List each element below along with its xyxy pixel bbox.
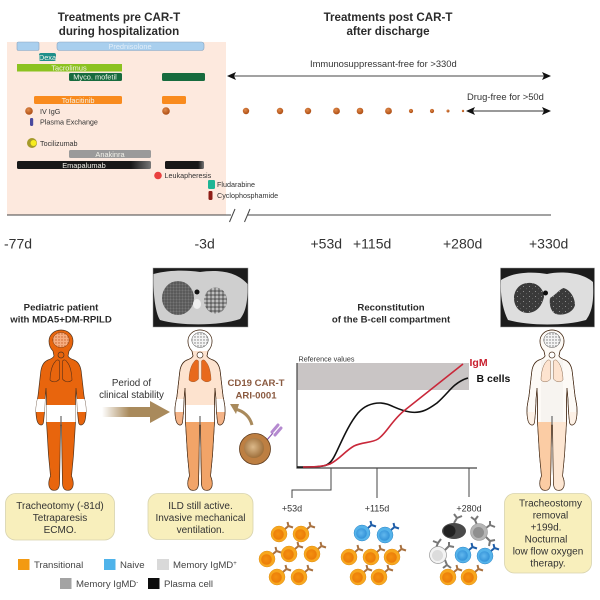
legend item: transitional: Transitional [34, 560, 83, 571]
chart: B-cell and IgM recovery curves [297, 354, 511, 468]
marker: fludarabine: Fludarabine [217, 180, 255, 189]
reference values band: Reference values [298, 354, 355, 364]
marker: plasma exchange: Plasma Exchange [40, 118, 98, 126]
arrow: drug-free period: Drug-free for >50d [467, 91, 544, 102]
CT scan: chest after recovery [500, 268, 594, 327]
callout: status at diagnosis: Tetraparesis [33, 513, 87, 524]
timeline day labels [4, 236, 568, 252]
figure: patient at CAR-T infusion, partly recovered [174, 329, 226, 492]
marker: IV IgG [25, 107, 170, 116]
legend item: naive [104, 559, 145, 571]
callout: status before infusion: Invasive mechanical [155, 513, 246, 524]
tick label: +280d: +280d [456, 504, 482, 514]
title: treatments post CAR-T: Treatments post CAR-T [324, 11, 452, 24]
legend [18, 559, 237, 590]
cell cluster: +280d mixed B-cell subsets [430, 514, 499, 585]
heading: reconstitution of B-cell compartment: Reconstitution [357, 302, 425, 314]
legend item: memory IgMD-: - [136, 580, 138, 586]
callout: status after recovery [504, 494, 592, 573]
text: period of clinical stability: clinical stability [99, 390, 164, 401]
heading: reconstitution of B-cell compartment: of the B-cell compartment [332, 314, 451, 326]
heading: pediatric patient: with MDA5+DM-RPILD [9, 314, 112, 326]
marker: tocilizumab [27, 138, 78, 148]
timeline day labels: -3d [194, 236, 215, 252]
callout: status after recovery: low flow oxygen [513, 546, 583, 558]
legend item: plasma cell [148, 578, 213, 590]
bar: tacrolimus [17, 64, 122, 72]
arrow: drug-free period [467, 91, 550, 111]
legend item: memory IgMD+: Memory IgMD [173, 560, 233, 571]
heading: pediatric patient: Pediatric patient [24, 302, 98, 314]
legend item: memory IgMD+: + [233, 561, 237, 567]
label: B cells: B cells [476, 373, 511, 385]
reference values band [297, 354, 469, 390]
callout: status before infusion: ventilation. [177, 525, 224, 536]
dots: IV IgG doses post CAR-T [243, 108, 464, 114]
bars: emapalumab [17, 161, 204, 170]
legend item: memory IgMD+ [157, 559, 237, 571]
bars: prednisolone: Prednisolone [108, 42, 152, 51]
timeline day labels: -77d [4, 236, 32, 252]
marker: leukapheresis: Leukapheresis [164, 171, 212, 180]
cell cluster: +115d naive and transitional cells [341, 521, 406, 585]
callout: status before infusion: ILD still active. [168, 501, 233, 512]
legend item: memory IgMD-: Memory IgMD [76, 579, 136, 590]
tick label: +53d: +53d [282, 504, 302, 514]
timeline day labels: +115d [353, 236, 391, 252]
cell cluster: +53d transitional cells [259, 522, 326, 585]
bars: emapalumab: Emapalumab [62, 161, 106, 170]
title: treatments post CAR-T: after discharge [346, 25, 430, 38]
panel: treatments pre CAR-T background [7, 42, 226, 215]
arrow: immunosuppressant-free period: Immunosuppressant-free for >330d [310, 58, 457, 69]
legend item: plasma cell: Plasma cell [164, 579, 213, 590]
tick label: +115d: +115d [365, 504, 389, 514]
callout: status after recovery: Nocturnal [525, 534, 567, 546]
label: IgM: IgM [470, 357, 488, 369]
timeline axis with break [7, 209, 551, 222]
callout: status at diagnosis: Tracheotomy (-81d) [16, 501, 104, 512]
chart time ticks [292, 468, 469, 498]
marker: cyclophosphamide: Cyclophosphamide [217, 191, 278, 200]
legend item: transitional [18, 559, 83, 571]
bars: mycophenolate mofetil [69, 72, 205, 82]
callout: status at diagnosis: ECMO. [44, 525, 76, 536]
callout: status before infusion [148, 494, 253, 540]
bar: dexamethasone: Dexa [39, 53, 57, 62]
bars: tofacitinib [34, 96, 186, 105]
callout: status after recovery: removal [533, 510, 568, 522]
title: treatments pre CAR-T: during hospitalization [59, 25, 179, 38]
bar: anakinra: Anakinra [95, 150, 125, 159]
figure: patient before treatment, orange body [35, 330, 87, 490]
bar: anakinra [69, 150, 151, 159]
bar: tacrolimus: Tacrolimus [51, 64, 87, 72]
callout: status after recovery: therapy. [530, 558, 566, 570]
icon: CAR-T cell [240, 425, 281, 464]
arrow: CAR-T infusion curve [230, 404, 252, 425]
CT scan: chest before CAR-T [153, 268, 248, 327]
legend item: naive: Naive [120, 560, 145, 571]
timeline day labels: +280d [443, 236, 482, 252]
marker: tocilizumab: Tocilizumab [40, 139, 78, 148]
plasma cell [442, 514, 466, 539]
marker: IV IgG: IV IgG [40, 107, 61, 116]
curve: IgM [303, 364, 463, 467]
callout: status after recovery: Tracheostomy [519, 498, 582, 510]
bars: tofacitinib: Tofacitinib [62, 96, 94, 105]
timeline day labels: +53d [310, 236, 342, 252]
callout: status after recovery: +199d. [531, 522, 561, 534]
title: treatments pre CAR-T: Treatments pre CAR-T [58, 11, 180, 24]
text: period of clinical stability: Period of [112, 378, 151, 389]
label: CD19 CAR-T ARI-0001: ARI-0001 [235, 390, 277, 402]
memory IgMD- cell [470, 516, 495, 546]
timeline day labels: +330d [529, 236, 568, 252]
memory IgMD+ cell [430, 539, 454, 568]
label: CD19 CAR-T ARI-0001: CD19 CAR-T [227, 378, 285, 389]
curve: B cells [297, 378, 468, 467]
bars: mycophenolate mofetil: Myco. mofetil [73, 72, 117, 82]
arrow: period of stability [102, 401, 170, 423]
bars: prednisolone [17, 42, 204, 51]
callout: status at diagnosis [6, 494, 114, 540]
figure: patient after recovery [526, 330, 578, 492]
